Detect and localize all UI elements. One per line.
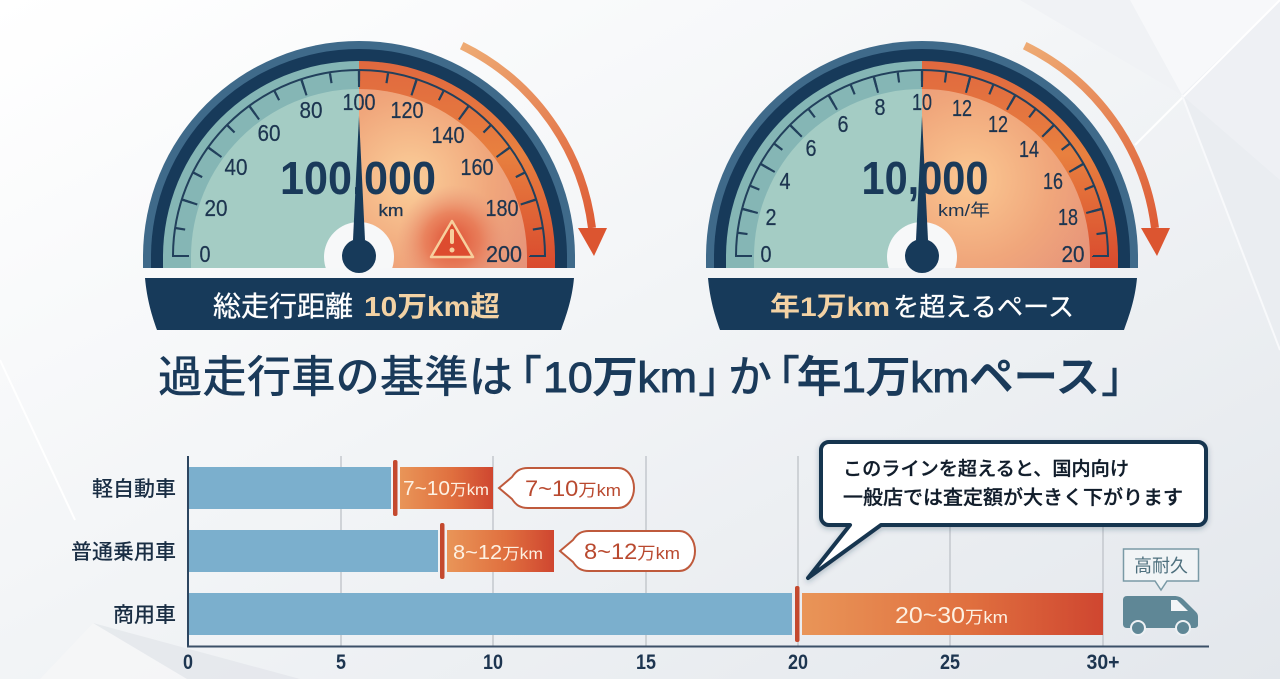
row: passenger car	[71, 523, 695, 579]
title: 過走行車の基準は	[158, 353, 513, 402]
arrow: increasing mileage	[462, 46, 607, 256]
title: 10万km	[543, 354, 697, 402]
title: 「	[498, 353, 542, 402]
gauge scale numbers: 80	[300, 97, 322, 123]
row: kei car	[92, 460, 634, 516]
gauge scale numbers: 10	[912, 89, 932, 115]
callout	[499, 468, 634, 508]
bar chart	[71, 456, 1209, 674]
gauge ticks	[173, 70, 545, 257]
banner: 10万km超	[364, 291, 500, 322]
callout: threshold note: このラインを超えると、国内向け	[843, 458, 1129, 480]
axis numbers: 30+	[1086, 651, 1120, 674]
gauge scale numbers: 140	[432, 122, 464, 148]
banner: を超えるペース	[893, 292, 1074, 322]
banner: 年1万km	[770, 292, 890, 322]
gauge scale numbers: 120	[390, 97, 424, 123]
gauge value: 10,000	[862, 152, 988, 204]
gauge unit: km/年	[938, 201, 990, 220]
row: commercial vehicle: 20~30 万km	[895, 602, 1008, 628]
title: 」	[1101, 353, 1145, 402]
axis numbers: 10	[483, 651, 503, 674]
gauge scale numbers: 20	[1062, 241, 1084, 267]
row: kei car: 7~10万km	[403, 478, 489, 500]
gauge scale numbers	[760, 89, 1084, 267]
gauge value: 100,000	[280, 152, 436, 204]
gauge scale numbers: 100	[342, 89, 376, 115]
gauge scale numbers: 160	[460, 154, 494, 180]
gauge scale numbers: 40	[224, 154, 248, 180]
banner	[708, 278, 1137, 330]
gauge unit: km	[378, 201, 404, 220]
axis numbers: 25	[940, 651, 960, 674]
gauge scale numbers: 8	[874, 94, 886, 120]
gauge scale numbers: 2	[766, 204, 776, 230]
gauge: total mileage	[143, 41, 607, 330]
gauge scale numbers: 14	[1019, 136, 1039, 162]
callout: 7~10万km	[525, 476, 621, 501]
title: か	[728, 353, 772, 402]
van	[1123, 596, 1198, 635]
arrow: increasing pace	[1025, 46, 1170, 256]
title	[158, 353, 1145, 402]
gauge scale numbers: 180	[486, 195, 518, 221]
row: passenger car: 8~12 万km	[453, 542, 543, 564]
gauge scale numbers: 200	[486, 241, 522, 267]
gauge scale numbers: 60	[258, 120, 280, 146]
gauge scale numbers: 0	[200, 241, 210, 267]
axis numbers: 20	[788, 651, 808, 674]
gauge scale numbers: 12	[988, 111, 1008, 137]
banner	[145, 278, 574, 330]
gauge scale numbers: 12	[952, 95, 972, 121]
icon: warning triangle	[431, 221, 473, 257]
axis numbers: 0	[183, 651, 193, 674]
gauge: annual pace	[706, 41, 1170, 330]
gauge dial	[143, 41, 575, 268]
banner: 総走行距離	[213, 291, 353, 322]
gauge scale numbers: 6	[838, 111, 848, 137]
chart grid and axes	[187, 456, 1209, 647]
gauge scale numbers: 0	[760, 241, 772, 267]
gauge scale numbers: 4	[780, 168, 791, 194]
row: commercial vehicle	[113, 586, 1103, 642]
gauge scale numbers: 20	[204, 195, 228, 221]
icon: high-durability van	[1123, 549, 1198, 635]
gauge needle	[905, 116, 939, 273]
row: kei car: 軽自動車	[92, 478, 176, 501]
title: 「	[756, 353, 800, 402]
callout: 8~12万km	[584, 539, 680, 564]
title: 」	[698, 353, 742, 402]
callout: threshold note: 一般店では査定額が大きく下がります	[843, 487, 1183, 509]
row: commercial vehicle: 商用車	[113, 604, 176, 627]
axis numbers: 15	[636, 651, 656, 674]
callout: threshold note	[808, 442, 1206, 578]
gauge scale numbers: 6	[806, 135, 816, 161]
gauge dial	[706, 41, 1138, 268]
gauge scale numbers: 16	[1043, 168, 1063, 194]
label tag: 高耐久	[1134, 556, 1188, 576]
gauge ticks	[736, 70, 1108, 257]
gauge scale numbers	[200, 89, 522, 267]
axis numbers	[183, 651, 1120, 674]
gauge scale numbers: 18	[1058, 204, 1078, 230]
callout	[560, 531, 695, 571]
row: passenger car: 普通乗用車	[71, 541, 176, 564]
gauge needle	[342, 116, 376, 273]
axis numbers: 5	[336, 651, 346, 674]
title: 年1万kmペース	[797, 354, 1100, 402]
